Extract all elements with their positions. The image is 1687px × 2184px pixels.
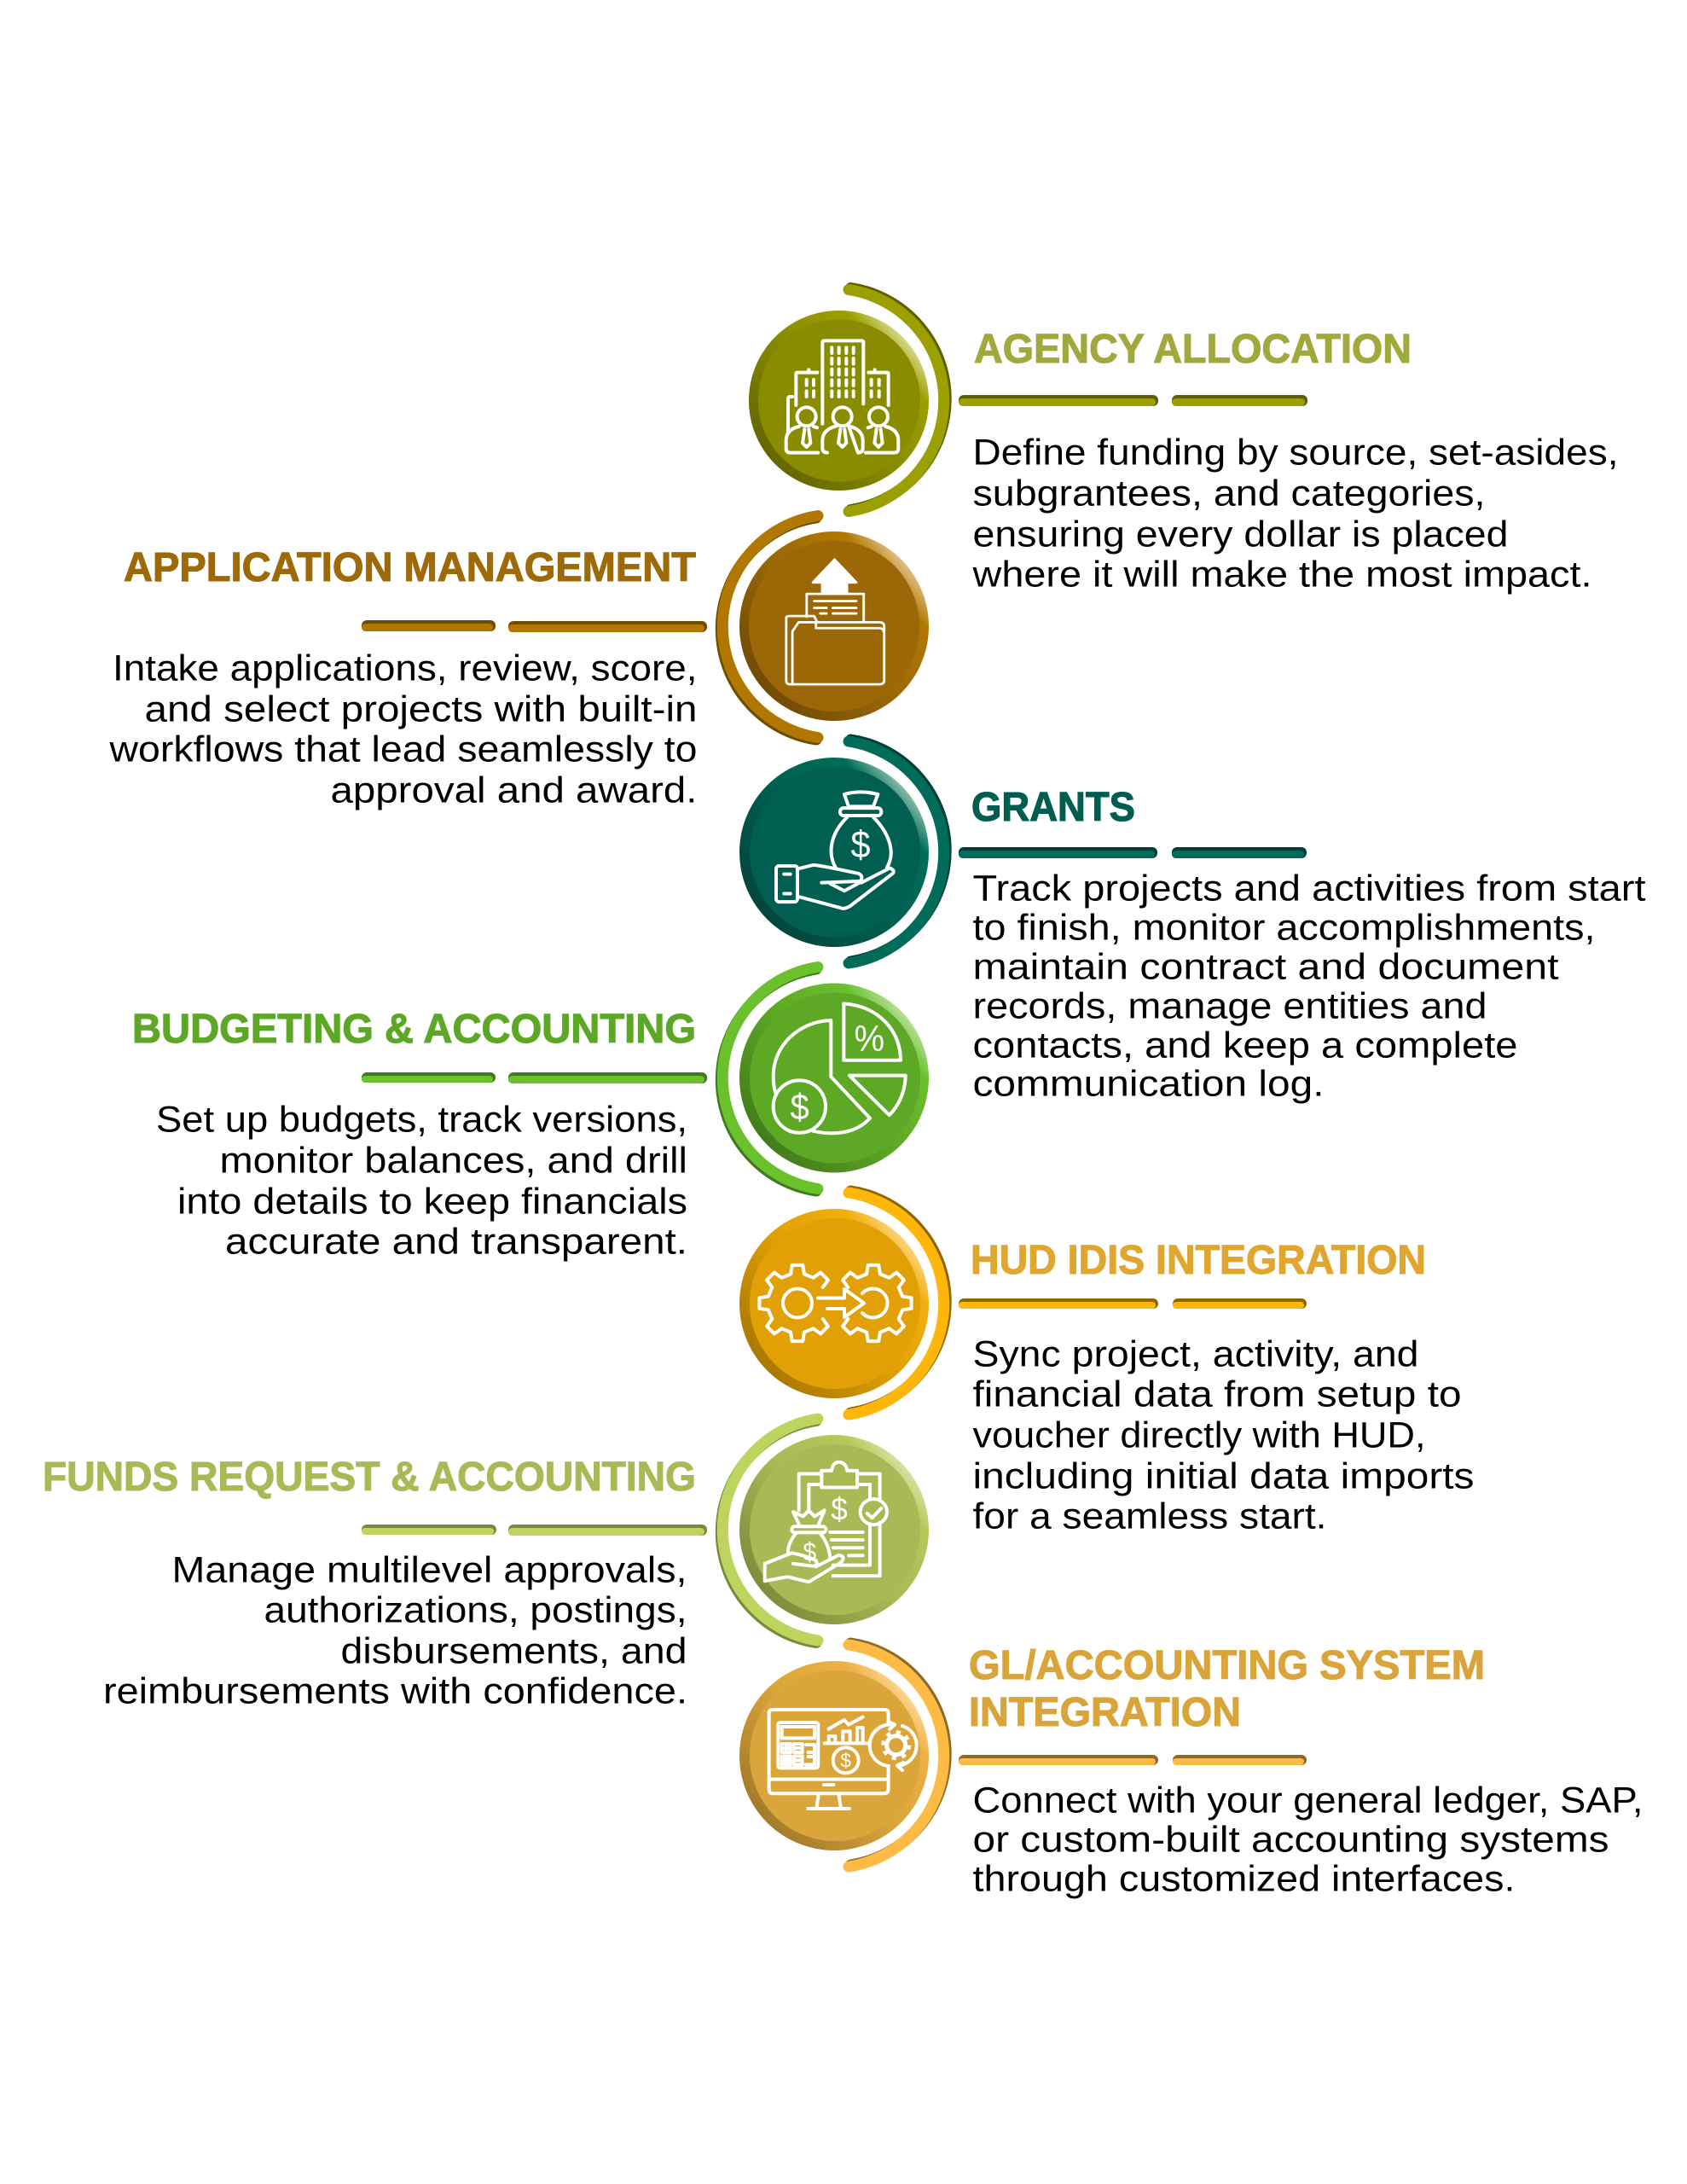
- arc: agency allocation: [849, 288, 946, 512]
- icon: hand holding money bag: [776, 792, 894, 909]
- description: budgeting and accounting: into details to keep financials: [177, 1181, 687, 1222]
- heading: agency allocation: AGENCY ALLOCATION: [974, 327, 1412, 372]
- description: hud idis integration: for a seamless start.: [972, 1496, 1327, 1537]
- description: gl accounting system integration: Connect with your general ledger, SAP,: [972, 1780, 1643, 1821]
- divider bars: grants: [959, 847, 1307, 858]
- description: agency allocation: subgrantees, and categories,: [972, 473, 1486, 514]
- icon: pie chart with coin: $: [791, 1086, 809, 1127]
- description: grants: maintain contract and document: [972, 947, 1559, 988]
- disc: funds request and accounting: [739, 1435, 929, 1624]
- arc: grants: [849, 740, 946, 963]
- description: gl accounting system integration: through customized interfaces.: [972, 1858, 1515, 1899]
- divider bars: hud idis integration: [959, 1298, 1307, 1309]
- description: funds request and accounting: reimbursements with confidence.: [103, 1670, 687, 1711]
- icon: monitor with calculator, chart and gear: $: [840, 1749, 851, 1771]
- icon: folder with upload arrow: [786, 560, 884, 684]
- description: application management: approval and award.: [331, 770, 698, 810]
- description: agency allocation: ensuring every dollar is placed: [972, 514, 1508, 555]
- divider bars: gl accounting system integration: [959, 1755, 1307, 1765]
- divider bars: budgeting and accounting: [362, 1072, 707, 1083]
- description: application management: [108, 648, 698, 810]
- panel: Agency Allocation: [749, 288, 1619, 595]
- heading: budgeting and accounting: BUDGETING & ACCOUNTING: [132, 1007, 696, 1052]
- icon: clipboard with money bag in hand: [765, 1462, 887, 1582]
- description: grants: Track projects and activities from start: [972, 868, 1646, 909]
- heading: application management: APPLICATION MANAGEMENT: [124, 545, 696, 590]
- description: budgeting and accounting: Set up budgets, track versions,: [156, 1099, 687, 1140]
- icon: clipboard with money bag in hand: $: [831, 1490, 848, 1527]
- description: grants: communication log.: [972, 1063, 1324, 1104]
- heading: funds request and accounting: FUNDS REQUEST & ACCOUNTING: [43, 1455, 696, 1500]
- disc: grants: [739, 758, 929, 947]
- description: gl accounting system integration: [972, 1780, 1643, 1899]
- disc: budgeting and accounting: [739, 983, 929, 1172]
- divider bars: agency allocation: [959, 395, 1307, 406]
- panel: GL/Accounting System Integration: [739, 1643, 1643, 1899]
- description: funds request and accounting: [103, 1549, 687, 1711]
- panel: Application Management: [108, 515, 929, 810]
- heading: grants: GRANTS: [971, 785, 1135, 830]
- description: application management: and select projects with built-in: [145, 689, 698, 730]
- description: funds request and accounting: disbursements, and: [341, 1631, 687, 1672]
- disc: agency allocation: [749, 311, 929, 491]
- divider bars: application management: [362, 620, 707, 632]
- icon: clipboard with money bag in hand: $: [803, 1537, 816, 1566]
- description: gl accounting system integration: or custom-built accounting systems: [972, 1819, 1609, 1860]
- heading: gl accounting system integration: GL/ACCOUNTING SYSTEM: [969, 1643, 1485, 1688]
- description: application management: Intake applications, review, score,: [113, 648, 698, 689]
- icon: pie chart with coin: %: [855, 1018, 884, 1059]
- heading: gl accounting system integration: [969, 1643, 1485, 1735]
- description: budgeting and accounting: accurate and transparent.: [225, 1222, 687, 1263]
- description: hud idis integration: Sync project, activity, and: [972, 1334, 1419, 1375]
- panel: Budgeting & Accounting: [132, 967, 929, 1263]
- icon: two gears with arrow: [759, 1265, 912, 1341]
- description: budgeting and accounting: monitor balances, and drill: [220, 1140, 687, 1181]
- description: hud idis integration: voucher directly with HUD,: [972, 1414, 1426, 1455]
- description: grants: to finish, monitor accomplishments,: [972, 908, 1595, 949]
- disc: hud idis integration: [739, 1209, 929, 1398]
- description: application management: workflows that lead seamlessly to: [108, 729, 697, 770]
- description: hud idis integration: [972, 1334, 1474, 1537]
- description: budgeting and accounting: [156, 1099, 687, 1263]
- panel: Grants: [739, 740, 1646, 1104]
- icon: office towers and people: [786, 340, 898, 453]
- disc: gl accounting system integration: [739, 1661, 929, 1850]
- description: hud idis integration: including initial data imports: [972, 1455, 1474, 1496]
- heading: gl accounting system integration: INTEGRATION: [969, 1690, 1241, 1735]
- description: grants: contacts, and keep a complete: [972, 1025, 1518, 1066]
- icon: monitor with calculator, chart and gear: [769, 1710, 917, 1809]
- icon: hand holding money bag: $: [850, 824, 871, 866]
- icon: pie chart with coin: [774, 1003, 906, 1133]
- description: grants: records, manage entities and: [972, 986, 1487, 1027]
- description: agency allocation: [971, 432, 1619, 595]
- arc: hud idis integration: [849, 1191, 946, 1414]
- description: agency allocation: where it will make the most impact.: [971, 555, 1591, 595]
- description: hud idis integration: financial data from setup to: [972, 1374, 1462, 1414]
- description: grants: [972, 868, 1646, 1104]
- disc: application management: [739, 531, 929, 721]
- arc: budgeting and accounting: [721, 967, 818, 1191]
- description: funds request and accounting: Manage multilevel approvals,: [172, 1549, 687, 1590]
- description: agency allocation: Define funding by source, set-asides,: [972, 432, 1619, 473]
- arc: gl accounting system integration: [849, 1643, 946, 1867]
- description: funds request and accounting: authorizations, postings,: [264, 1590, 687, 1631]
- arc: application management: [721, 515, 818, 740]
- arc: funds request and accounting: [721, 1419, 818, 1643]
- panel: Funds Request & Accounting: [43, 1419, 929, 1711]
- divider bars: funds request and accounting: [362, 1525, 707, 1536]
- panel: HUD IDIS Integration: [739, 1191, 1474, 1537]
- heading: hud idis integration: HUD IDIS INTEGRATION: [971, 1238, 1426, 1283]
